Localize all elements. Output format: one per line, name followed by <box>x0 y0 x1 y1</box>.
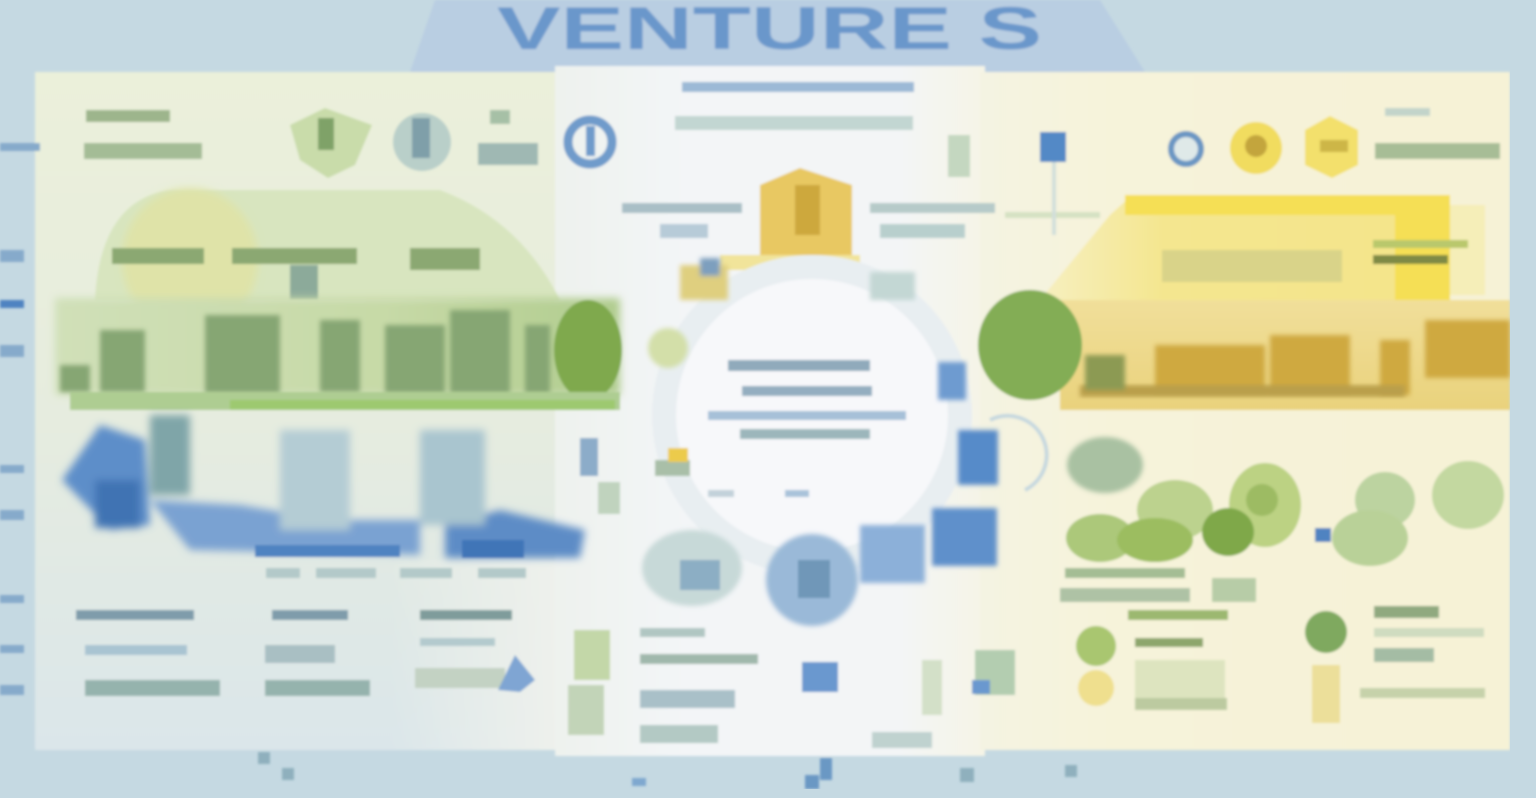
center cycle ring <box>580 258 998 626</box>
connector: top right <box>948 135 1100 218</box>
right heading <box>1375 108 1500 159</box>
center heading <box>675 82 914 130</box>
panel: left lower highlight <box>390 560 560 750</box>
tree <box>554 300 622 400</box>
forest band <box>55 298 622 410</box>
ring node 4 <box>938 362 966 400</box>
left heading <box>84 110 202 159</box>
bush 2 <box>1137 480 1213 540</box>
bush 4 <box>1066 514 1193 562</box>
left edge marks <box>0 143 40 695</box>
sun panel <box>1040 195 1485 300</box>
bushes <box>1066 437 1504 566</box>
center text <box>708 360 906 497</box>
icon: green ball <box>1076 626 1116 666</box>
icon: blue ring <box>1171 134 1201 164</box>
small label <box>478 110 538 165</box>
bottom scattered marks <box>258 752 1077 789</box>
bottom label <box>872 732 932 748</box>
icon: green globe <box>1305 611 1347 653</box>
text block <box>1135 638 1227 710</box>
blue icon <box>802 662 838 692</box>
lakeside strip <box>70 392 620 410</box>
ring node 1 <box>680 258 728 300</box>
ring node 7 <box>860 525 925 583</box>
lower left text blocks <box>76 568 535 696</box>
panel: center <box>555 66 985 756</box>
icon: tree <box>393 113 451 171</box>
ring node 10 <box>655 448 690 476</box>
text block 3 <box>415 610 512 688</box>
panel: right <box>980 72 1510 750</box>
icon: blue mark <box>498 655 535 692</box>
icon: yellow badge 2 <box>1305 116 1358 178</box>
bush 1 <box>1067 437 1143 493</box>
text block 1 <box>76 610 220 696</box>
ring node 9 <box>642 530 742 606</box>
title banner <box>410 0 1145 72</box>
bush 3 <box>1229 463 1301 547</box>
icon: green leaf badge <box>290 108 372 178</box>
sun label <box>1162 240 1468 282</box>
vine icon <box>568 630 610 735</box>
wheat field <box>978 290 1510 410</box>
icon: yellow ball <box>1078 670 1114 706</box>
plant icons <box>922 650 1015 715</box>
tree <box>978 290 1082 400</box>
lower right text <box>1060 568 1485 723</box>
bush 5 <box>1202 508 1254 556</box>
left header row <box>84 108 612 178</box>
water area <box>62 415 585 558</box>
blue square <box>1040 132 1066 162</box>
icon: yellow badge <box>1230 122 1282 174</box>
ring node 6 <box>932 508 997 566</box>
text block <box>1360 606 1485 698</box>
ring node 8 <box>766 534 858 626</box>
left green hill <box>95 188 560 332</box>
ring node 11 <box>580 438 620 514</box>
bush 6 <box>1315 461 1504 566</box>
center bottom content <box>568 628 1015 748</box>
connector ring right <box>990 416 1047 490</box>
text block 2 <box>265 610 370 696</box>
ring node 5 <box>958 430 998 485</box>
icon: yellow stack <box>1312 665 1340 723</box>
icon: ring badge <box>568 120 612 164</box>
gold medallion <box>720 168 860 270</box>
hill labels <box>112 248 480 299</box>
right header row <box>1040 108 1500 235</box>
ring node 3 <box>648 328 688 368</box>
panel: left <box>35 72 560 750</box>
center side labels <box>622 203 995 238</box>
yellow disc <box>122 188 258 332</box>
text block <box>640 628 758 743</box>
ring node 2 <box>870 272 915 300</box>
